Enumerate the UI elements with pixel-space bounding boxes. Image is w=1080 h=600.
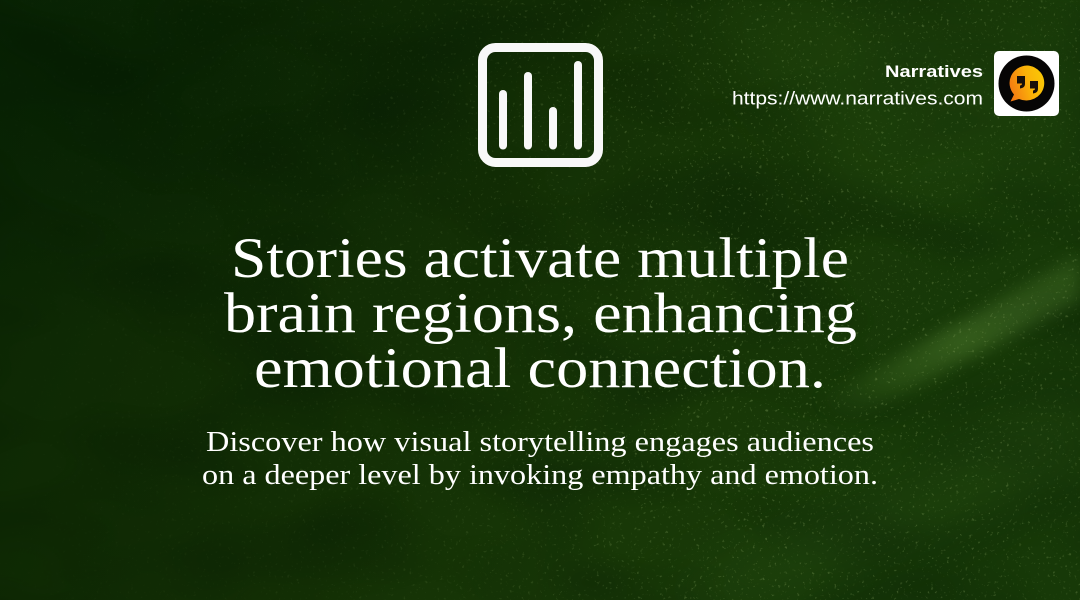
title: Stories activate multiple [231, 227, 849, 290]
brand name: Narratives [885, 62, 983, 81]
subtitle: on a deeper level by invoking empathy and emotion. [202, 459, 878, 491]
title: brain regions, enhancing [224, 282, 857, 345]
title: emotional connection. [254, 337, 826, 400]
subtitle: Discover how visual storytelling engages audiences [206, 426, 874, 458]
brand url: https://www.narratives.com [732, 88, 983, 108]
